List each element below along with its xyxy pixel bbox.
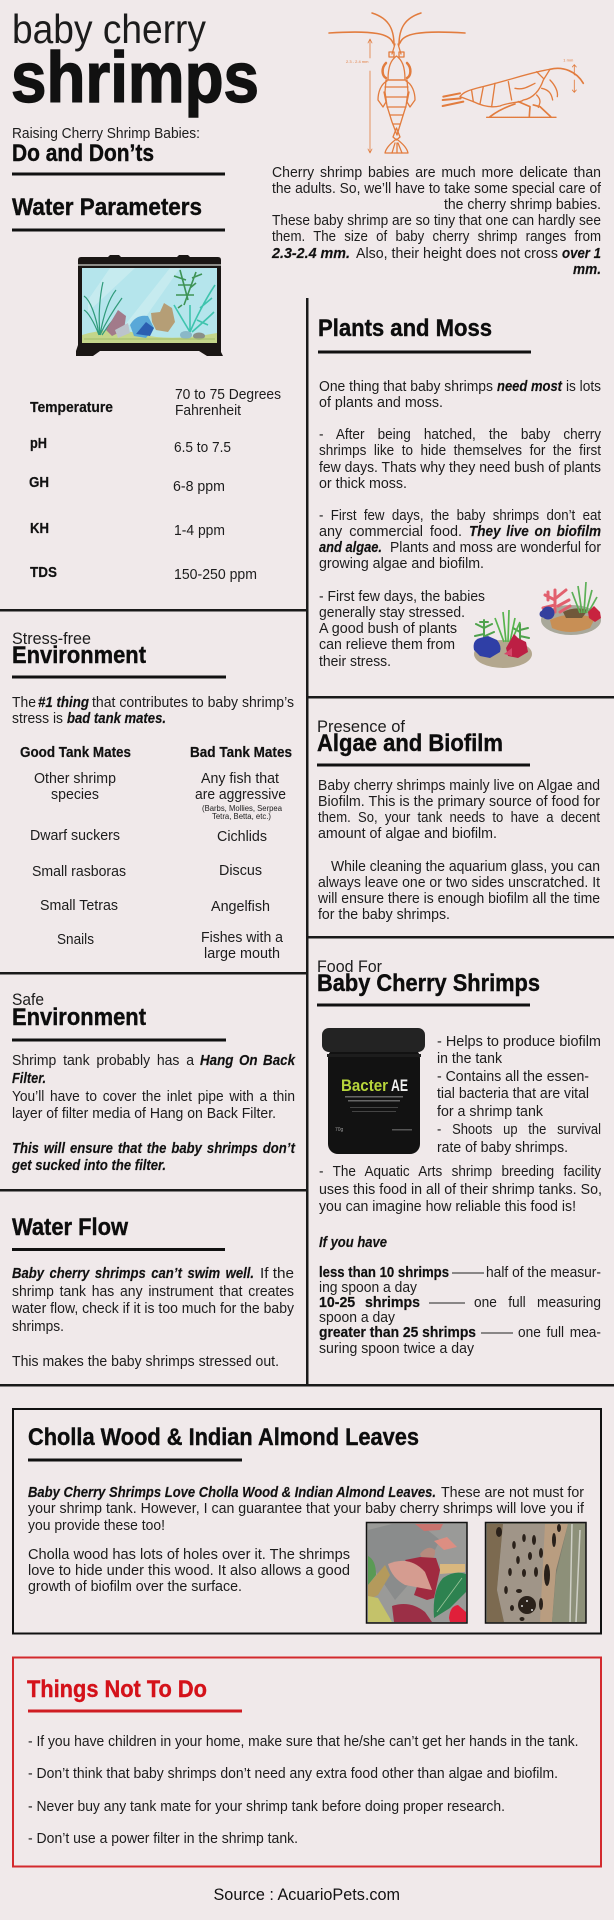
- body text: Baby cherry shrimps mainly live on Algae and: [318, 778, 600, 794]
- heading: [318, 315, 531, 354]
- icon: bacter AE jar: AE: [391, 1076, 408, 1095]
- list: bad tank mates: Angelfish: [211, 899, 270, 915]
- body text: This will ensure that the baby shrimps don’t: [12, 1141, 296, 1157]
- dosage: ing spoon a day: [319, 1280, 418, 1296]
- body text: - After being hatched, the baby cherry: [319, 427, 602, 443]
- heading: Safe: [12, 990, 44, 1009]
- body text: you can imagine how reliable this food is!: [319, 1199, 576, 1215]
- list: bad tank mates: are aggressive: [195, 787, 286, 803]
- icon: bacter AE jar: 70g: [335, 1127, 344, 1133]
- source credit: Source : AcuarioPets.com: [214, 1885, 400, 1904]
- dosage: one full measuring: [474, 1295, 601, 1311]
- heading: [317, 717, 530, 766]
- row: pH: [30, 436, 231, 456]
- heading: Environment: [12, 1004, 146, 1031]
- body text: Shrimp tank probably has a: [12, 1053, 195, 1069]
- body text: [319, 379, 602, 670]
- list: good tank mates: Other shrimp: [34, 771, 116, 787]
- subtitle: Raising Cherry Shrimp Babies:: [12, 125, 200, 142]
- row: pH: 6.5 to 7.5: [174, 440, 231, 456]
- body text: Baby Cherry Shrimps Love Cholla Wood & Indian Almond Leaves.: [28, 1485, 436, 1501]
- body text: for a shrimp tank: [437, 1104, 544, 1120]
- body text: Filter.: [12, 1071, 46, 1087]
- intro: The: [12, 695, 36, 711]
- body text: A good bush of plants: [319, 621, 457, 637]
- heading: [28, 1424, 419, 1462]
- photo: indian almond leaves: [366, 1522, 467, 1623]
- body text: water flow, check if it is too much for the baby: [11, 1301, 295, 1317]
- heading: Plants and Moss: [318, 315, 492, 342]
- row: TDS: TDS: [30, 565, 57, 581]
- body text: Baby cherry shrimps can’t swim well.: [12, 1266, 254, 1282]
- list: bad tank mates: large mouth: [204, 946, 280, 962]
- icon: shrimp side view with height: [443, 57, 583, 117]
- intro: that contributes to baby shrimp’s: [92, 695, 294, 711]
- body text: few days. Thats why they need bush of plants: [319, 460, 601, 476]
- body text: generally stay stressed.: [319, 605, 465, 621]
- body text: shrimp tank has any instrument that creates: [12, 1284, 294, 1300]
- body text: and algae.: [319, 540, 382, 556]
- body text: need most: [497, 379, 563, 395]
- subtitle: Do and Don’ts: [12, 140, 154, 167]
- heading: Cholla Wood & Indian Almond Leaves: [28, 1424, 419, 1451]
- heading: [12, 990, 226, 1042]
- intro: [12, 695, 294, 727]
- body text: While cleaning the aquarium glass, you can: [331, 859, 600, 875]
- body text: always leave one or two sides unscratched. It: [318, 875, 600, 891]
- title: shrimps: [11, 39, 259, 118]
- list: good tank mates: Small rasboras: [32, 864, 126, 880]
- icon: coral cluster: [540, 582, 601, 635]
- intro text: 2.3-2.4 mm.: [271, 246, 350, 262]
- body text: get sucked into the filter.: [11, 1158, 166, 1174]
- row: temperature: Temperature: [30, 400, 113, 416]
- body text: Hang On Back: [200, 1053, 296, 1069]
- row: GH: [29, 475, 225, 495]
- list: - Don’t think that baby shrimps don’t need any extra food other than algae and biofilm.: [28, 1766, 558, 1782]
- body text: love to hide under this wood. It also allows a good: [28, 1563, 350, 1579]
- list: bad tank mates: Discus: [219, 863, 262, 879]
- body text: Biofilm. This is the primary source of food for: [318, 794, 600, 810]
- heading: [12, 629, 226, 678]
- list: bad tank mates: Cichlids: [217, 829, 267, 845]
- intro text: Also, their height does not cross: [356, 246, 558, 262]
- heading: Food For: [317, 957, 382, 976]
- dosage: one full mea-: [518, 1325, 601, 1341]
- panel: cholla wood and indian almond leaves: [13, 1409, 601, 1634]
- row: temperature: [30, 387, 281, 419]
- icon: shrimp top view with length: 2.3 - 2.4 mm: [346, 59, 369, 64]
- intro text: the adults. So, we’ll have to take some special care of: [272, 181, 602, 197]
- list: good tank mates: Small Tetras: [40, 898, 118, 914]
- heading: [12, 1214, 225, 1251]
- dosage: 10-25 shrimps: [319, 1295, 420, 1311]
- body text: You’ll have to cover the inlet pipe with a thin: [12, 1089, 295, 1105]
- icon: plant cluster: [474, 610, 532, 668]
- list: - If you have children in your home, make sure that he/she can’t get her hands in the tank.: [28, 1734, 578, 1750]
- row: KH: KH: [30, 521, 49, 537]
- list: good tank mates: [20, 745, 131, 948]
- body text: growing algae and biofilm.: [319, 556, 484, 572]
- heading: [27, 1676, 242, 1712]
- heading: Water Flow: [12, 1214, 128, 1241]
- body text: you provide these too!: [28, 1518, 165, 1534]
- body text: or thick moss.: [319, 476, 407, 492]
- icon: bacter AE jar: Bacter: [341, 1076, 388, 1095]
- body text: - Helps to produce biofilm: [437, 1034, 601, 1050]
- intro text: Cherry shrimp babies are much more delicate than: [272, 165, 601, 181]
- heading: [317, 957, 540, 1006]
- intro: stress is: [12, 711, 63, 727]
- panel: algae and biofilm: [317, 717, 600, 923]
- body text: [317, 778, 600, 923]
- heading: Baby Cherry Shrimps: [317, 970, 540, 997]
- intro text: the cherry shrimp babies.: [444, 197, 601, 213]
- body text: shrimps like to hide themselves for the first: [319, 443, 601, 459]
- panel: plants and moss: [318, 315, 602, 670]
- row: GH: GH: [29, 475, 49, 491]
- dosage: [319, 1235, 601, 1357]
- body text: of plants and moss.: [319, 395, 443, 411]
- icon: bacter AE jar: [322, 1028, 425, 1154]
- body text: uses this food in all of their shrimp tanks. So,: [319, 1182, 602, 1198]
- list: - Never buy any tank mate for your shrimp tank before doing proper research.: [28, 1799, 505, 1815]
- list: bad tank mates: Bad Tank Mates: [190, 745, 292, 761]
- list: bad tank mates: Tetra, Betta, etc.): [212, 812, 271, 821]
- body text: layer of filter media of Hang on Back Filter.: [12, 1106, 276, 1122]
- body text: any commercial food.: [319, 524, 462, 540]
- body text: [11, 1053, 296, 1174]
- row: GH: 6-8 ppm: [173, 479, 225, 495]
- row: temperature: Fahrenheit: [175, 403, 241, 419]
- body text: Cholla wood has lots of holes over it. The shrimps: [28, 1547, 350, 1563]
- heading: Things Not To Do: [27, 1676, 207, 1703]
- body text: - Contains all the essen-: [437, 1069, 589, 1085]
- heading: Algae and Biofilm: [317, 730, 503, 757]
- list: good tank mates: Dwarf suckers: [30, 828, 120, 844]
- panel: water flow: [11, 1214, 295, 1370]
- heading: Presence of: [317, 717, 405, 736]
- row: pH: pH: [30, 436, 47, 452]
- list: bad tank mates: (Barbs, Mollies, Serpea: [202, 804, 283, 813]
- body text: One thing that baby shrimps: [319, 379, 493, 395]
- intro text: over 1: [562, 246, 601, 262]
- panel: food for baby cherry shrimps: [317, 957, 602, 1357]
- body text: your shrimp tank. However, I can guarantee that your baby cherry shrimps will love you if: [28, 1501, 585, 1517]
- dosage: If you have: [319, 1235, 387, 1251]
- row: KH: 1-4 ppm: [174, 523, 225, 539]
- heading: Stress-free: [12, 629, 91, 648]
- body text: in the tank: [437, 1051, 503, 1067]
- list: bad tank mates: [190, 745, 292, 962]
- dosage: half of the measur-: [486, 1265, 601, 1281]
- body text: [11, 1266, 295, 1370]
- dosage: greater than 25 shrimps: [319, 1325, 476, 1341]
- panel: things not to do: [13, 1658, 601, 1866]
- intro: #1 thing: [38, 695, 89, 711]
- dosage: spoon a day: [319, 1310, 396, 1326]
- body text: This makes the baby shrimps stressed out.: [12, 1354, 279, 1370]
- list: good tank mates: Snails: [57, 932, 94, 948]
- body text: will ensure there is enough biofilm all the time: [317, 891, 600, 907]
- body text: - First few days, the babies: [319, 589, 485, 605]
- body text: They live on biofilm: [469, 524, 601, 540]
- table: water parameters: [29, 387, 281, 583]
- heading: water parameters: Water Parameters: [12, 194, 202, 221]
- body text: can relieve them from: [319, 637, 455, 653]
- intro: bad tank mates.: [67, 711, 166, 727]
- row: temperature: 70 to 75 Degrees: [175, 387, 281, 403]
- body text: for the baby shrimps.: [318, 907, 450, 923]
- body text: - The Aquatic Arts shrimp breeding facility: [319, 1164, 602, 1180]
- subtitle: [12, 125, 225, 176]
- title: [11, 6, 259, 118]
- intro text: [271, 165, 602, 278]
- intro text: These baby shrimp are so tiny that one can hardly see: [272, 213, 601, 229]
- body text: is lots: [566, 379, 601, 395]
- body text: If the: [260, 1266, 294, 1282]
- icon: shrimp top view with length: [329, 13, 465, 153]
- row: TDS: [30, 565, 257, 583]
- body text: growth of biofilm over the surface.: [28, 1579, 242, 1595]
- body text: [319, 1034, 602, 1215]
- row: KH: [30, 521, 225, 539]
- title: baby cherry: [12, 6, 206, 52]
- dosage: less than 10 shrimps: [319, 1265, 449, 1281]
- list: good tank mates: Good Tank Mates: [20, 745, 131, 761]
- body text: These are not must for: [441, 1485, 584, 1501]
- body text: their stress.: [319, 654, 391, 670]
- intro text: mm.: [573, 262, 601, 278]
- body text: rate of baby shrimps.: [437, 1140, 568, 1156]
- heading: Environment: [12, 642, 146, 669]
- body text: Plants and moss are wonderful for: [390, 540, 601, 556]
- list: good tank mates: species: [51, 787, 99, 803]
- panel: stress-free environment: [12, 629, 294, 962]
- body text: amount of algae and biofilm.: [318, 826, 497, 842]
- body text: shrimps.: [12, 1319, 64, 1335]
- list: bad tank mates: Any fish that: [201, 771, 279, 787]
- body text: tial bacteria that are vital: [437, 1086, 589, 1102]
- dosage: suring spoon twice a day: [319, 1341, 475, 1357]
- photo: cholla wood: [486, 1522, 586, 1623]
- body text: [28, 1485, 585, 1595]
- icon: aquarium: [76, 255, 223, 356]
- list: - Don’t use a power filter in the shrimp tank.: [28, 1831, 298, 1847]
- panel: safe environment: [11, 990, 296, 1174]
- icon: shrimp side view with height: 1 mm: [563, 57, 574, 62]
- list: bad tank mates: Fishes with a: [201, 930, 284, 946]
- row: TDS: 150-250 ppm: [174, 567, 257, 583]
- heading: water parameters: [12, 194, 225, 232]
- list: [28, 1734, 578, 1847]
